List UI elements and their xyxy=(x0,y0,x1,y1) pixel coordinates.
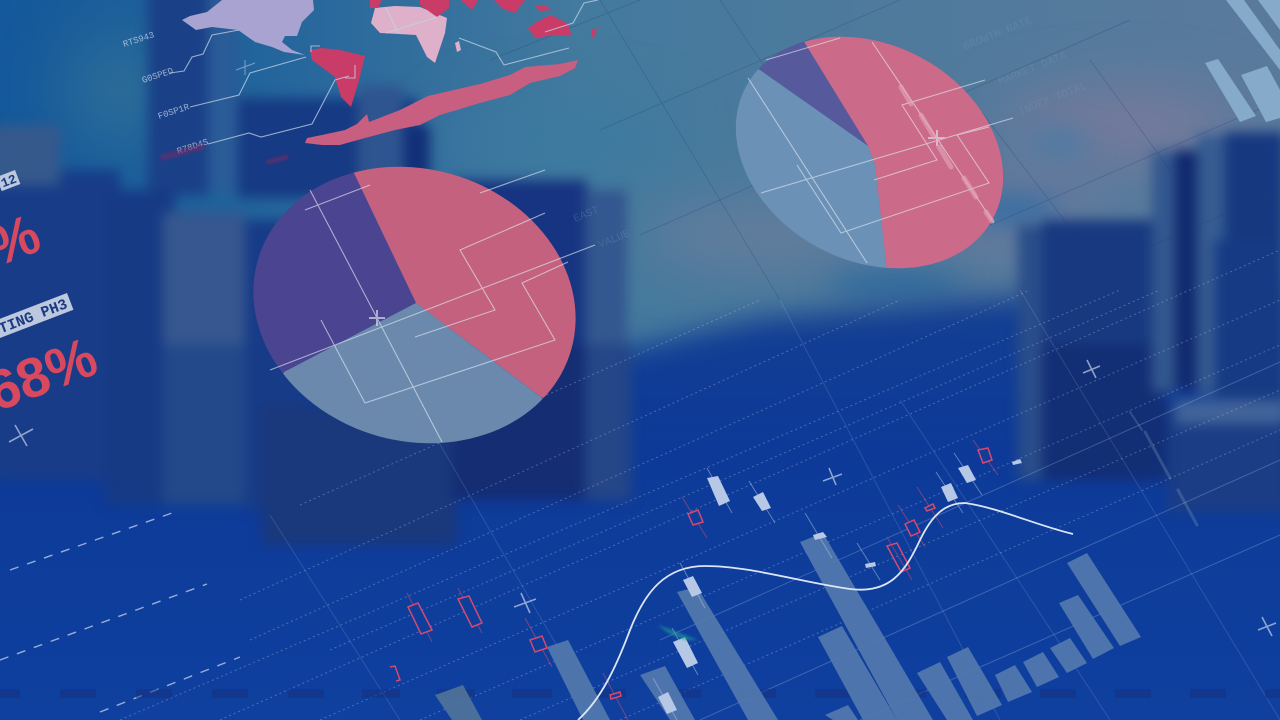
faint chart labels: INDEX TOTAL xyxy=(1017,80,1089,119)
map: labels: F0SP1R xyxy=(157,102,191,122)
candlestick chart xyxy=(390,440,1022,720)
bar chart xyxy=(435,533,1141,720)
map: red under-labels xyxy=(160,143,289,165)
pie overlay: connector lines xyxy=(748,38,1013,263)
map: labels: G0SPED xyxy=(141,66,175,86)
map: Antarctica xyxy=(305,60,578,145)
map: Australia xyxy=(528,15,571,38)
side streak xyxy=(1130,412,1197,525)
pie overlay: glowing streak xyxy=(901,87,992,221)
slice: pink xyxy=(354,166,576,398)
map: labels: RTS943 xyxy=(122,30,156,50)
pie chart: large xyxy=(253,166,596,444)
crosshair markers xyxy=(9,360,1276,636)
bottom ticker bar xyxy=(0,689,1280,698)
map: North America xyxy=(182,0,314,55)
map: Africa xyxy=(371,6,447,63)
slice: pink xyxy=(804,36,1004,268)
line chart: trend curve xyxy=(578,503,1073,720)
top-right bar chart xyxy=(1205,0,1280,122)
map: Madagascar xyxy=(455,41,461,52)
glow: teal accent xyxy=(658,625,698,640)
faint chart labels: MARKET DATA xyxy=(997,50,1069,89)
faint chart labels xyxy=(572,15,1089,252)
candles: red outline xyxy=(390,440,998,720)
slice: purple xyxy=(758,42,868,146)
left stat panel xyxy=(0,170,105,423)
map: South America xyxy=(310,48,365,107)
slice: purple xyxy=(253,172,416,372)
faint chart labels: GROWTH RATE xyxy=(962,15,1034,54)
pie chart: small xyxy=(736,36,1014,268)
slice: blue-grey xyxy=(283,303,543,444)
world map xyxy=(122,0,598,165)
map: connector lines and brackets xyxy=(170,0,598,144)
map: New Zealand xyxy=(591,28,597,38)
candles: light xyxy=(653,453,1022,720)
map: labels xyxy=(122,30,210,157)
map: Eurasia xyxy=(370,0,552,17)
faint chart labels: EAST xyxy=(572,205,601,226)
pie overlay: connector lines xyxy=(270,170,595,442)
white dashed lines, left xyxy=(0,513,240,712)
slice: blue xyxy=(736,69,886,268)
map: labels: R78D4S xyxy=(176,137,210,157)
faint chart labels: VALUE xyxy=(597,228,632,252)
